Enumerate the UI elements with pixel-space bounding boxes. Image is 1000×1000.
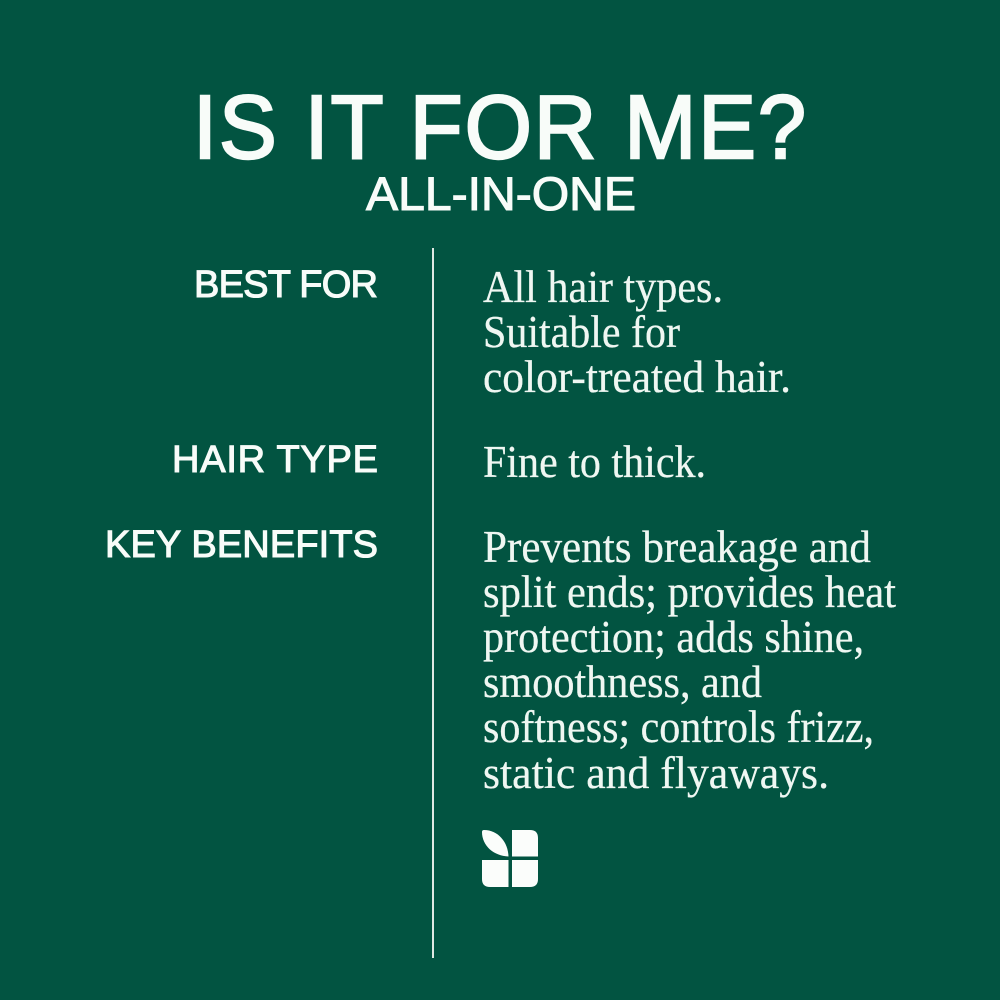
row text: key benefits: split ends; provides heat [483,567,896,617]
row text: hair type: Fine to thick. [483,437,706,487]
row text: best for: Suitable for [483,307,680,357]
subtitle: ALL-IN-ONE [366,167,636,220]
row text: key benefits: Prevents breakage and [483,522,871,572]
row text: key benefits: smoothness, and [483,657,762,707]
row text: key benefits: static and flyaways. [483,748,829,798]
row text: best for: color-treated hair. [483,352,791,402]
icon: leaf and squares logo [482,830,538,887]
row label: best for: BEST FOR [194,264,378,306]
row label: hair type: HAIR TYPE [172,439,378,481]
centre divider line [432,248,434,958]
row label: key benefits: KEY BENEFITS [105,524,378,566]
row text: best for: All hair types. [483,262,723,312]
title: IS IT FOR ME? [193,78,808,178]
row text: key benefits [483,522,896,798]
row text: key benefits: protection; adds shine, [483,612,864,662]
row text: key benefits: softness; controls frizz, [483,702,874,752]
row text: best for [483,262,791,402]
